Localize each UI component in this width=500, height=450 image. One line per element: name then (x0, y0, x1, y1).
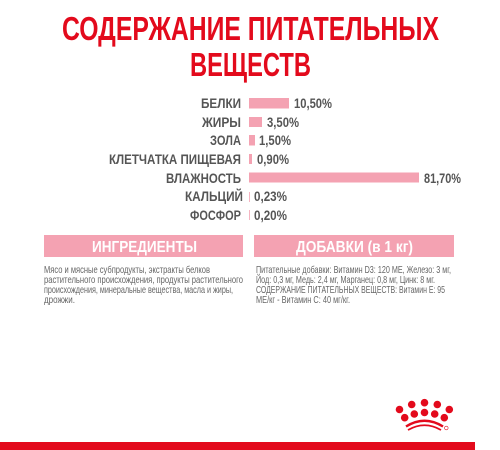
row: ash (210, 133, 291, 148)
row: calcium: 0,23% (254, 189, 287, 204)
icon: royal canin crown logo (396, 399, 453, 430)
row: phosphorus: ФОСФОР (190, 208, 241, 223)
row: calcium (185, 189, 287, 204)
heading: additives (254, 235, 454, 257)
text block: additives (256, 264, 451, 306)
panel: ingredients (44, 235, 243, 306)
title: ВЕЩЕСТВ (190, 46, 311, 83)
row: ash: ЗОЛА (210, 133, 241, 148)
text block: ingredients: Мясо и мясные субпродукты, экстракты белков (44, 264, 210, 276)
text block: ingredients: происхождения, минеральные вещества, масла и жиры, (44, 284, 233, 296)
footer bar (0, 442, 475, 450)
heading: ingredients (44, 235, 243, 257)
row: fat: ЖИРЫ (201, 115, 241, 130)
row: moisture: 81,70% (424, 171, 461, 186)
row: phosphorus: 0,20% (254, 208, 287, 223)
row: fat (201, 115, 299, 130)
heading: additives: ДОБАВКИ (в 1 кг) (296, 239, 413, 256)
bar chart: nutrients (109, 96, 461, 223)
row: protein (201, 96, 332, 111)
row: calcium: КАЛЬЦИЙ (185, 189, 243, 204)
text block: ingredients: растительного происхождения, продукты растительного (44, 274, 243, 286)
title (62, 10, 439, 83)
text block: additives: МЕ/кг - Витамин С: 40 мг/кг. (256, 294, 350, 306)
row: fiber: 0,90% (257, 152, 289, 167)
row: ash: 1,50% (259, 133, 291, 148)
row: moisture (166, 171, 461, 186)
row: moisture: ВЛАЖНОСТЬ (166, 171, 241, 186)
row: fat: 3,50% (267, 115, 299, 130)
row: protein: 10,50% (294, 96, 332, 111)
row: protein: БЕЛКИ (201, 96, 241, 111)
panel: additives (254, 235, 454, 306)
row: fiber: КЛЕТЧАТКА ПИЩЕВАЯ (109, 152, 241, 167)
row: phosphorus (190, 208, 287, 223)
heading: ingredients: ИНГРЕДИЕНТЫ (92, 239, 197, 256)
text block: ingredients: дрожжи. (44, 294, 75, 306)
text block: ingredients (44, 264, 243, 306)
